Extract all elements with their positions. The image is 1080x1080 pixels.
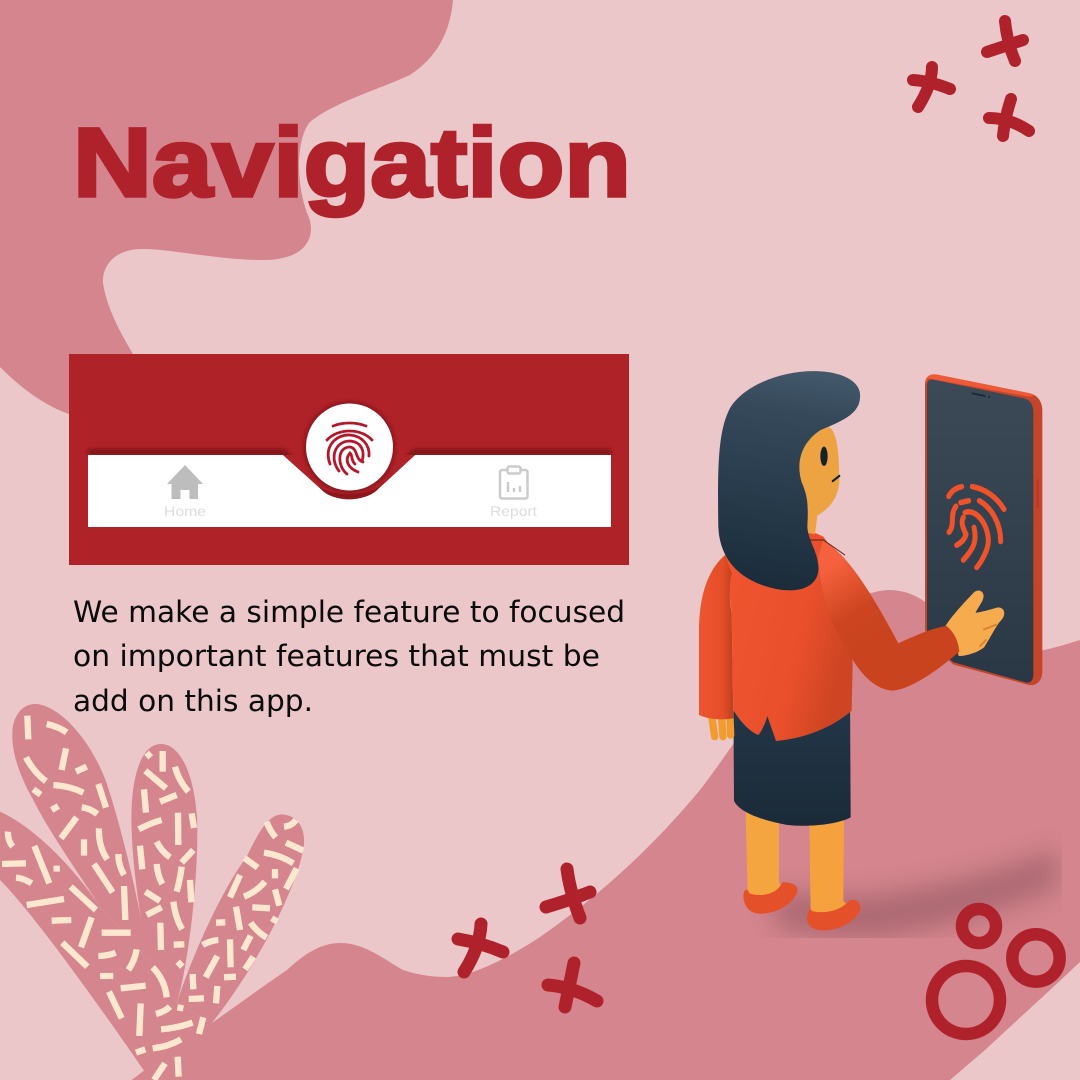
blob: bottom right (133, 590, 1080, 1080)
eye (820, 447, 828, 466)
hair (718, 371, 860, 590)
blob: top left (0, 0, 453, 414)
text block: description: add on this app. (73, 684, 313, 718)
decorative crosses: top right (913, 21, 1029, 136)
icon: home (167, 465, 203, 499)
title: Navigation (73, 108, 631, 217)
plant illustration (0, 704, 304, 1080)
label: report: Report (490, 503, 537, 519)
ground shadow (770, 850, 1060, 938)
decorative rings (932, 909, 1060, 1034)
icon: report clipboard (500, 466, 528, 498)
hand (947, 591, 1003, 655)
mouth (833, 476, 839, 481)
left sleeve (699, 555, 733, 719)
neck and face (799, 427, 839, 534)
right arm (818, 540, 959, 691)
text block: description: We make a simple feature to focused (73, 595, 625, 629)
collar line (803, 540, 845, 555)
phone (925, 374, 1042, 685)
white tab bar (88, 455, 611, 527)
text block: description (73, 595, 625, 718)
fingerprint button (306, 404, 393, 490)
label: home: Home (164, 503, 206, 519)
panel: navigation bar mockup (69, 354, 629, 565)
text block: description: on important features that must be (73, 639, 600, 673)
head (718, 371, 860, 590)
icon: fingerprint on screen (949, 487, 1004, 567)
jacket torso (725, 527, 853, 741)
notch band (283, 455, 415, 499)
legs, shoes and skirt (733, 693, 860, 930)
decorative crosses: bottom centre (458, 869, 597, 1007)
button shadow (304, 402, 394, 492)
left fingers (712, 718, 731, 737)
upper body (699, 527, 1003, 741)
illustration: woman touching phone (699, 371, 1042, 930)
